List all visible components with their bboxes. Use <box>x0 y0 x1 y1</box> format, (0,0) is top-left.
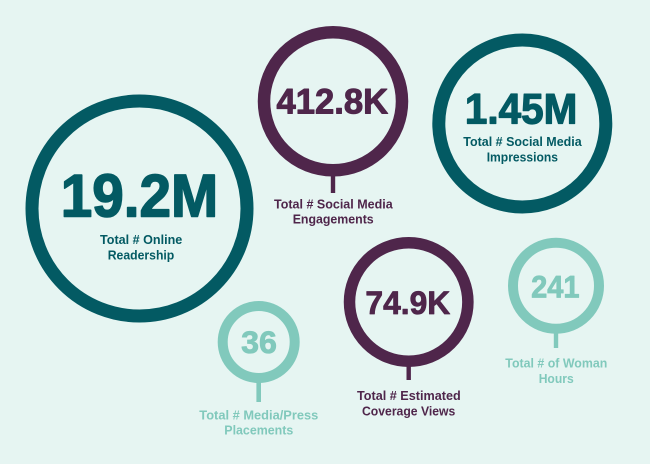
number: 241 <box>531 269 580 305</box>
stem <box>331 175 335 193</box>
label: Readership <box>108 248 174 262</box>
metric: online readership <box>32 101 247 316</box>
metric: woman hours <box>505 243 607 386</box>
label: Coverage Views <box>362 404 455 419</box>
stem <box>256 382 261 402</box>
number: 1.45M <box>465 87 577 134</box>
metric: media and press placements <box>199 306 318 438</box>
metric: estimated coverage views <box>350 243 468 419</box>
number: 36 <box>241 324 277 360</box>
ring <box>350 243 468 361</box>
ring <box>264 32 402 170</box>
ring <box>32 101 247 316</box>
stem <box>554 333 558 348</box>
label: Engagements <box>293 212 374 227</box>
number: 412.8K <box>276 82 389 122</box>
label: Hours <box>539 371 574 386</box>
label: Total # Media/Press <box>199 407 318 422</box>
ring <box>439 40 606 207</box>
ring <box>513 243 599 329</box>
label: Total # Social Media <box>274 196 393 211</box>
label: Placements <box>224 423 293 438</box>
number: 74.9K <box>365 285 451 321</box>
metric: social media engagements <box>264 32 402 227</box>
label: Total # Social Media <box>463 134 582 149</box>
label: Impressions <box>487 149 558 164</box>
label: Total # of Woman <box>505 355 607 370</box>
label: Total # Estimated <box>357 388 461 403</box>
number: 19.2M <box>61 163 218 230</box>
ring <box>223 306 295 378</box>
label: Total # Online <box>100 232 182 247</box>
metric: social media impressions <box>439 40 606 207</box>
stem <box>406 366 411 380</box>
